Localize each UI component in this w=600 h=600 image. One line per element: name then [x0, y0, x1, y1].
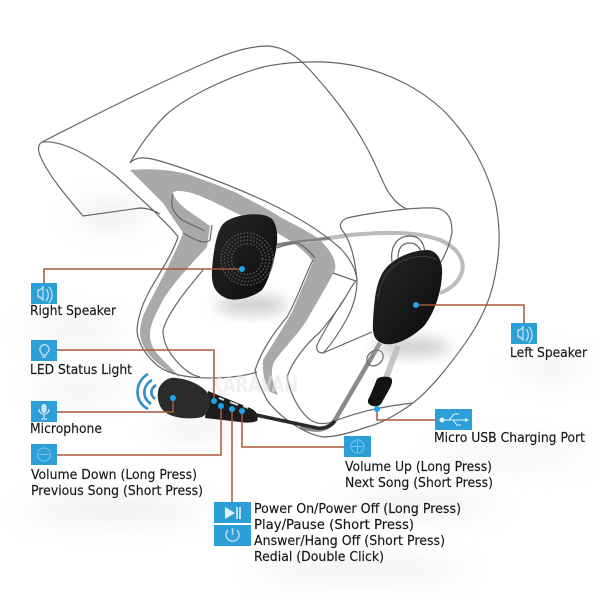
callout: volume up: Next Song (Short Press) — [345, 476, 493, 491]
callout: left speaker — [413, 302, 588, 361]
callout: microphone: Microphone — [30, 422, 102, 437]
callout: volume up: Volume Up (Long Press) — [345, 460, 492, 475]
callout: LED status light: LED Status Light — [30, 363, 132, 378]
callout: right speaker — [30, 266, 245, 319]
callout: volume up — [239, 408, 493, 491]
helmet outlines — [39, 46, 499, 437]
callout: volume down: Previous Song (Short Press) — [31, 484, 203, 499]
right speaker — [212, 214, 288, 314]
callout: LED status light — [30, 340, 217, 404]
callout: micro USB port: Micro USB Charging Port — [434, 431, 585, 446]
helmet line drawing — [39, 46, 499, 437]
microphone body — [158, 378, 258, 423]
callout: micro USB port — [374, 406, 585, 446]
callout: volume down: Volume Down (Long Press) — [31, 468, 197, 483]
gray inner padding bands — [130, 169, 335, 395]
callout: power and play: Redial (Double Click) — [254, 550, 384, 565]
callout: power and play — [214, 406, 461, 565]
callout: power and play: Answer/Hang Off (Short Press) — [254, 534, 445, 549]
callout: power and play: Power On/Power Off (Long Press) — [254, 502, 461, 517]
sound waves icon — [138, 374, 156, 409]
watermark: KARAVAN — [210, 373, 298, 398]
callout: volume down — [31, 403, 224, 499]
callout: microphone — [30, 395, 176, 437]
micro USB plug — [368, 377, 392, 406]
boom cable — [256, 415, 335, 428]
microphone foam — [158, 378, 210, 418]
callout: power and play: Play/Pause (Short Press) — [254, 518, 414, 533]
callout: right speaker: Right Speaker — [30, 304, 117, 319]
left speaker — [373, 250, 450, 356]
callout: left speaker: Left Speaker — [510, 346, 588, 361]
